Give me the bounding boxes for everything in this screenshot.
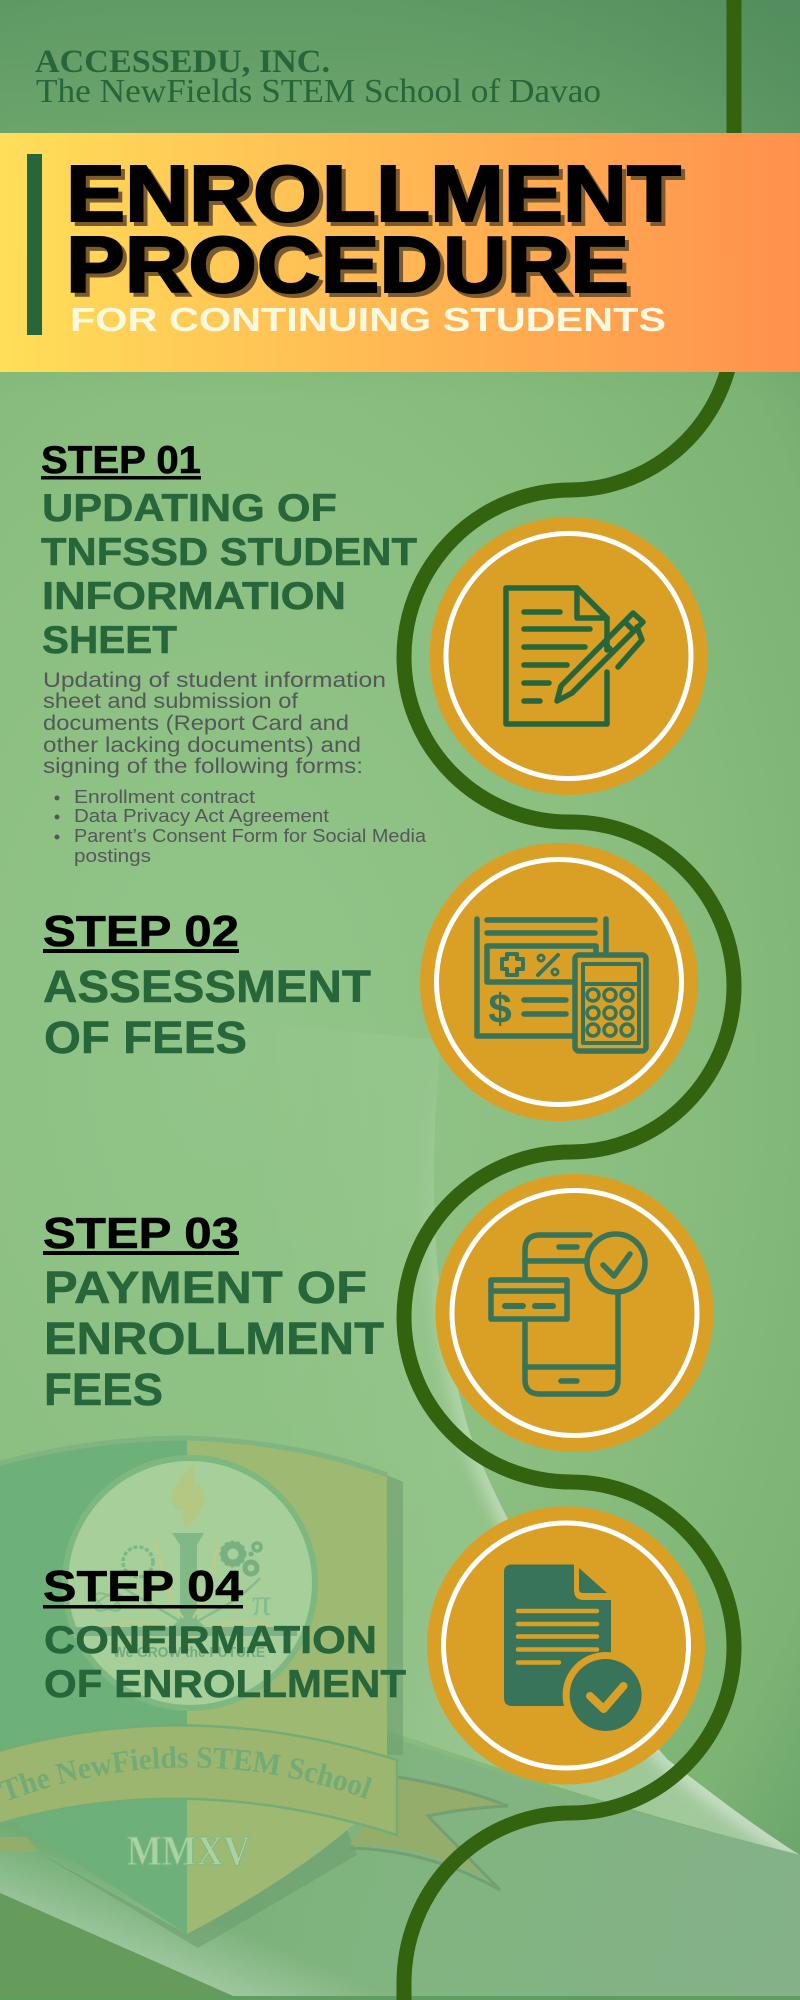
step 04 heading: CONFIRMATION bbox=[44, 1619, 377, 1662]
icon dollar sign: $ bbox=[488, 985, 512, 1032]
crest banner text: The NewFields STEM School bbox=[0, 1746, 372, 1800]
step 03 heading bbox=[44, 1262, 384, 1415]
subtitle: FOR CONTINUING STUDENTS bbox=[70, 301, 666, 338]
step 01 heading: TNFSSD STUDENT bbox=[41, 531, 417, 574]
step 04 label: STEP 04 bbox=[43, 1562, 244, 1611]
crest medallion bbox=[65, 1458, 315, 1708]
step 01 description: documents (Report Card and bbox=[43, 712, 349, 735]
step 02 heading: ASSESSMENT bbox=[43, 961, 371, 1012]
step 02 label: STEP 02 bbox=[43, 907, 239, 956]
step 01 label: STEP 01 bbox=[41, 439, 201, 482]
crest pi symbol: π bbox=[252, 1582, 271, 1624]
icon: document and pen bbox=[430, 517, 708, 795]
crest torch bbox=[67, 1465, 297, 1640]
step 04 bbox=[43, 1562, 407, 1706]
organisation name: ACCESSEDU, INC. bbox=[35, 44, 330, 80]
crest ribbon tails bbox=[0, 1777, 508, 1890]
title bbox=[66, 149, 681, 309]
step 03 label: STEP 03 bbox=[43, 1209, 239, 1258]
icon: phone payment bbox=[436, 1174, 714, 1452]
step 01 heading: SHEET bbox=[42, 619, 177, 662]
step 01 form list: Data Privacy Act Agreement bbox=[74, 806, 329, 826]
step 03 heading: FEES bbox=[44, 1364, 163, 1415]
step 01 form list: postings bbox=[74, 846, 151, 866]
title shadow: ENROLLMENT bbox=[70, 153, 685, 242]
step 01 bbox=[41, 439, 427, 866]
crest motto: We GROW the FUTURE bbox=[113, 1644, 265, 1661]
step 01 heading: UPDATING OF bbox=[42, 487, 337, 530]
step 01 description bbox=[43, 669, 386, 778]
step 02 heading: OF FEES bbox=[44, 1012, 247, 1063]
title: PROCEDURE bbox=[66, 220, 629, 309]
title shadow: PROCEDURE bbox=[70, 224, 633, 313]
step 04 heading bbox=[44, 1619, 407, 1706]
crest shield shadow bbox=[37, 1475, 403, 1948]
step 04 heading: OF ENROLLMENT bbox=[44, 1663, 407, 1706]
step 01 form list: Enrollment contract bbox=[74, 787, 255, 807]
header: school name bbox=[35, 44, 601, 110]
crest banner bbox=[0, 1725, 397, 1835]
icon: confirmed document bbox=[427, 1506, 705, 1784]
title band bbox=[0, 133, 800, 372]
step 01 description: other lacking documents) and bbox=[43, 734, 361, 757]
step 01 form list bbox=[54, 787, 427, 866]
step 01 heading: INFORMATION bbox=[42, 575, 346, 618]
step 03 bbox=[43, 1209, 384, 1415]
step 01 description: Updating of student information bbox=[43, 669, 386, 692]
crest shield bbox=[0, 1438, 387, 1934]
step 01 heading bbox=[41, 487, 417, 662]
step 02 heading bbox=[43, 961, 371, 1063]
winding connector path bbox=[404, 0, 734, 2000]
step 01 form list: Parent’s Consent Form for Social Media bbox=[74, 826, 427, 846]
step 02 bbox=[43, 907, 371, 1063]
school name: The NewFields STEM School of Davao bbox=[36, 73, 601, 110]
title shadow bbox=[70, 153, 685, 313]
title: ENROLLMENT bbox=[66, 149, 681, 238]
step 01 description: signing of the following forms: bbox=[43, 755, 363, 778]
school crest watermark bbox=[0, 1436, 508, 1948]
icon: fee statement and calculator bbox=[420, 843, 698, 1121]
title accent bar bbox=[27, 154, 42, 335]
crest year: MMXV bbox=[127, 1829, 250, 1875]
step 03 heading: PAYMENT OF bbox=[44, 1262, 367, 1313]
step 03 heading: ENROLLMENT bbox=[44, 1313, 384, 1364]
step 01 description: sheet and submission of bbox=[43, 690, 298, 713]
